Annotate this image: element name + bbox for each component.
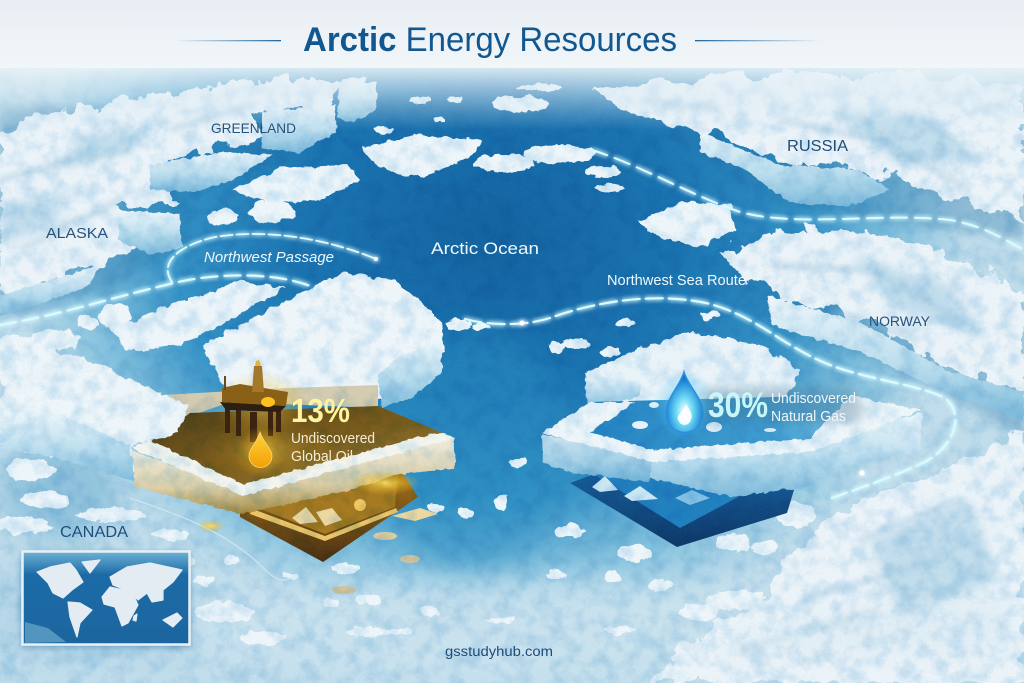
Eurasia bbox=[110, 563, 182, 602]
label: Northwest Sea Route: Northwest Sea Route bbox=[607, 273, 746, 289]
Greenland bbox=[82, 560, 100, 573]
oil platform: underwater block bbox=[240, 455, 438, 594]
oil platform: ice slab bbox=[132, 385, 455, 514]
icon: natural gas drop bbox=[653, 371, 717, 439]
label: Norway: NORWAY bbox=[869, 313, 931, 329]
gas statistic callout bbox=[704, 386, 862, 425]
soft shading on ice sheets bbox=[0, 110, 1000, 620]
gas caption: Undiscovered bbox=[771, 391, 856, 407]
source credit: gsstudyhub.com bbox=[445, 644, 553, 659]
continents bbox=[37, 560, 182, 637]
icon: oil drop bbox=[235, 426, 287, 478]
Africa bbox=[102, 587, 138, 626]
label: Greenland: GREENLAND bbox=[211, 120, 296, 136]
bottom-right pale ice shading bbox=[680, 595, 1010, 655]
title text: Arctic Energy Resources bbox=[303, 21, 677, 59]
crevasse shading on ice sheets bbox=[0, 100, 970, 650]
ice shelf cliff behind oil platform bbox=[378, 340, 442, 408]
route: faint line past oil platform bbox=[130, 498, 290, 580]
Antarctic shelf bbox=[25, 622, 66, 643]
North America bbox=[37, 563, 83, 598]
title rule right bbox=[695, 40, 820, 41]
gas platform: ice slab bbox=[542, 395, 922, 497]
route: Northwest Passage bbox=[0, 234, 378, 325]
bottom-left pale ice bbox=[0, 570, 195, 655]
gas platform: underwater block bbox=[570, 450, 800, 547]
ice mass shadows bbox=[0, 105, 1024, 440]
Australia bbox=[163, 613, 182, 627]
oil caption: Global Oil bbox=[291, 449, 353, 465]
ice cliffs: Greenland, Alaska, Russia, Norway bbox=[0, 82, 1024, 420]
label: Northwest Passage: Northwest Passage bbox=[204, 250, 334, 266]
central ice floes bbox=[0, 83, 815, 645]
Madagascar bbox=[133, 614, 137, 621]
oil percentage: 13% bbox=[291, 392, 350, 429]
oil caption: Undiscovered bbox=[291, 431, 375, 447]
label: Canada: CANADA bbox=[60, 524, 128, 541]
icon: oil rig bbox=[214, 360, 310, 442]
top header band bbox=[0, 0, 1024, 68]
oil statistic callout bbox=[291, 392, 375, 465]
left ice shelf near Canada bbox=[0, 368, 188, 482]
South America bbox=[68, 602, 92, 637]
glow: spark on route near oil platform bbox=[198, 520, 224, 532]
route: Northwest Sea Route bbox=[465, 150, 1024, 498]
label: Russia: RUSSIA bbox=[787, 138, 848, 155]
gas percentage: 30% bbox=[708, 386, 768, 425]
ice shelf behind gas platform bbox=[586, 332, 800, 408]
ice shelf cliff behind gas platform bbox=[585, 373, 640, 410]
label: Arctic Ocean: Arctic Ocean bbox=[431, 240, 539, 258]
inset: world map bbox=[22, 552, 190, 644]
title rule left bbox=[175, 40, 281, 41]
label: Alaska: ALASKA bbox=[46, 225, 108, 242]
top haze below header bbox=[0, 68, 1024, 130]
gas caption: Natural Gas bbox=[771, 409, 846, 425]
ice shelf behind oil platform bbox=[200, 272, 444, 402]
